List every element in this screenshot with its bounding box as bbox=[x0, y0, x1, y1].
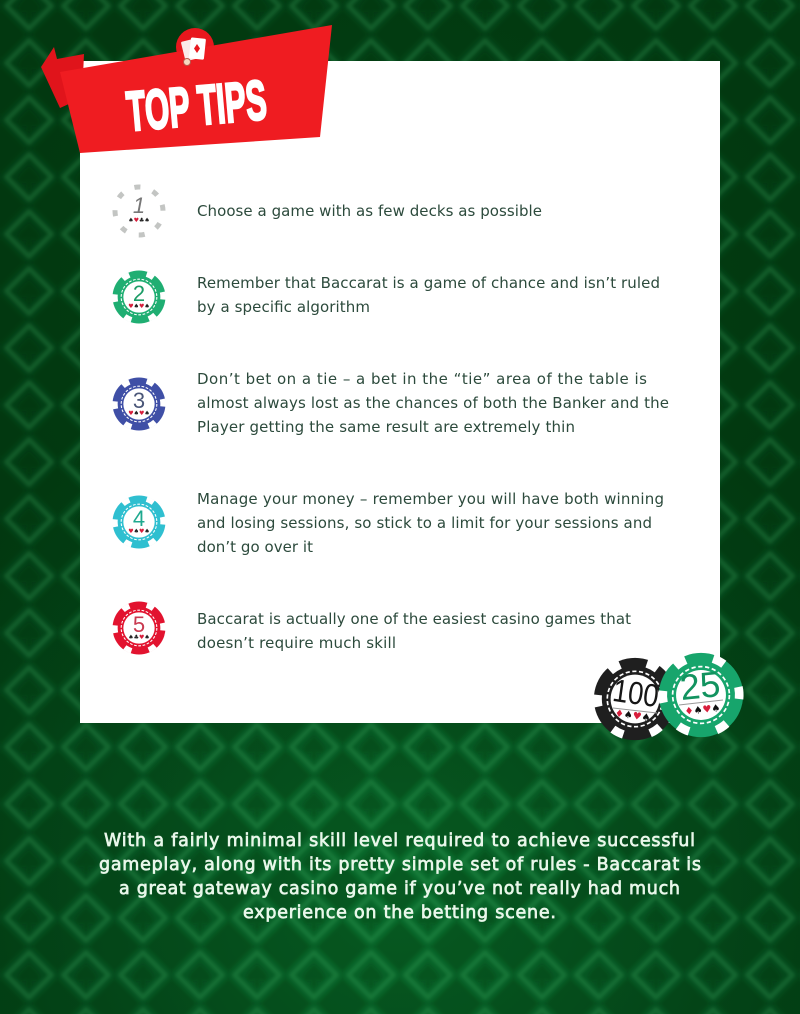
tip 5 text: Baccarat is actually one of the easiest casino games that bbox=[197, 610, 631, 628]
tip 3 text: Don’t bet on a tie – a bet in the “tie” area of the table is bbox=[197, 370, 647, 388]
closing paragraph: gameplay, along with its pretty simple set of rules - Baccarat is bbox=[99, 855, 701, 875]
banner ribbon bbox=[60, 25, 332, 153]
icon: white chip 1: ♠♥♣♠ bbox=[128, 217, 150, 224]
icon: blue chip 3 bbox=[110, 375, 168, 433]
tip 5 text: doesn’t require much skill bbox=[197, 634, 396, 652]
tip 2 bbox=[110, 268, 660, 326]
icon: red chip 5: 5 bbox=[133, 612, 145, 637]
tip 4 text: Manage your money – remember you will have both winning bbox=[197, 490, 664, 508]
tip 4 bbox=[110, 490, 664, 556]
icon: white chip 1 bbox=[110, 182, 168, 240]
icon: teal chip 4: 4 bbox=[133, 506, 145, 531]
icon: blue chip 3: 3 bbox=[133, 388, 145, 413]
panel: top tips card bbox=[80, 61, 720, 723]
tip 2 text: Remember that Baccarat is a game of chance and isn’t ruled bbox=[197, 274, 660, 292]
banner title: TOP TIPS bbox=[124, 68, 269, 143]
closing paragraph: With a fairly minimal skill level required to achieve successful bbox=[104, 831, 695, 851]
icon: green chip 2: ♥♠♥♠ bbox=[128, 303, 150, 310]
tip 2 text bbox=[197, 274, 660, 316]
tip 1 text: Choose a game with as few decks as possible bbox=[197, 202, 542, 220]
icon: red chip 5: ♠♣♥♠ bbox=[128, 634, 150, 641]
closing paragraph: experience on the betting scene. bbox=[243, 903, 556, 923]
banner tab behind icon bbox=[176, 28, 214, 66]
icon: black 100 chip bbox=[591, 655, 679, 743]
closing paragraph: a great gateway casino game if you’ve not really had much bbox=[119, 879, 680, 899]
icon: black 100 chip: 100 bbox=[611, 672, 661, 714]
icon: teal chip 4: ♥♠♥♠ bbox=[128, 528, 150, 535]
icon: green chip 2 bbox=[110, 268, 168, 326]
closing paragraph bbox=[99, 831, 701, 923]
icon: green 25 chip bbox=[656, 650, 746, 740]
icon: black 100 chip: ♦♠♥♠ bbox=[614, 708, 651, 724]
icon: blue chip 3: ♥♠♥♠ bbox=[128, 410, 150, 417]
tip 1 bbox=[110, 182, 542, 240]
icon: playing cards bbox=[181, 37, 206, 66]
icon: green 25 chip: 25 bbox=[678, 663, 722, 708]
tip 3 text bbox=[197, 370, 669, 436]
icon: green 25 chip: ♦♠♥♠ bbox=[684, 703, 721, 718]
tip 4 text: and losing sessions, so stick to a limit for your sessions and bbox=[197, 514, 652, 532]
tip 5 bbox=[110, 599, 631, 657]
tip 3 text: Player getting the same result are extremely thin bbox=[197, 418, 575, 436]
icon: green chip 2: 2 bbox=[133, 281, 145, 306]
icon: red chip 5 bbox=[110, 599, 168, 657]
tip 4 text: don’t go over it bbox=[197, 538, 313, 556]
tip 3 bbox=[110, 370, 669, 436]
banner: top tips bbox=[41, 25, 332, 153]
tip 5 text bbox=[197, 610, 631, 652]
banner tail bbox=[41, 47, 84, 108]
tip 2 text: by a specific algorithm bbox=[197, 298, 370, 316]
tip 3 text: almost always lost as the chances of both the Banker and the bbox=[197, 394, 669, 412]
icon: white chip 1: 1 bbox=[133, 193, 145, 218]
icon: teal chip 4 bbox=[110, 493, 168, 551]
tip 4 text bbox=[197, 490, 664, 556]
